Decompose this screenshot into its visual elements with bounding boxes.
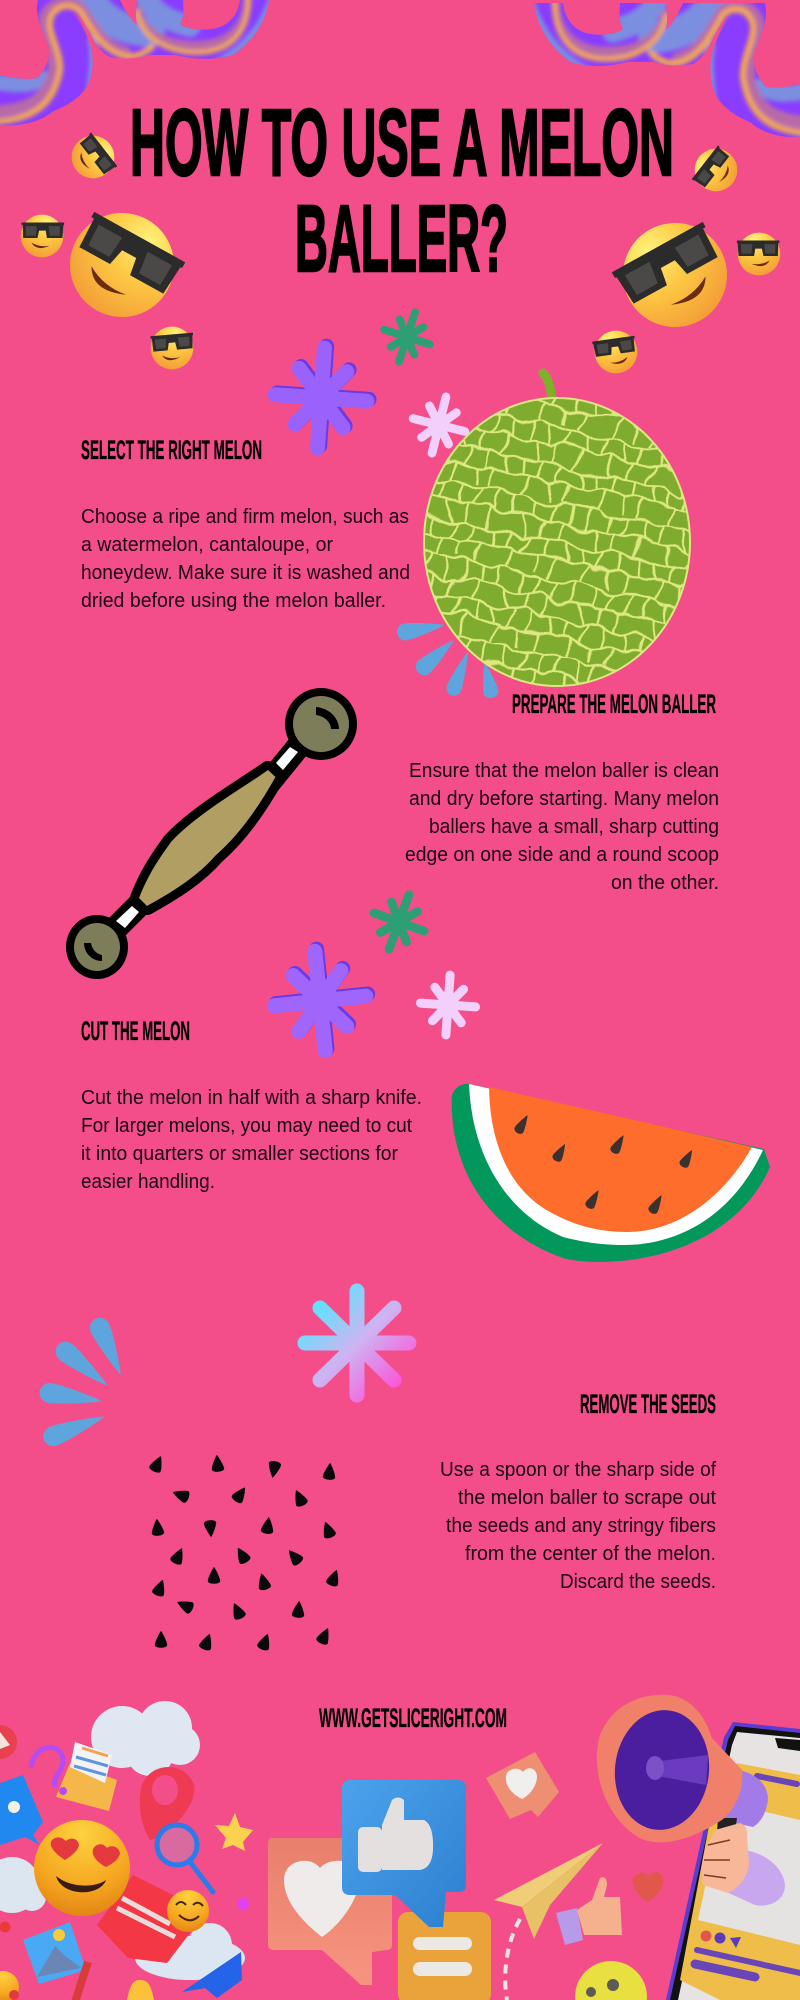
illustration: phone with megaphone	[597, 1695, 800, 2000]
icon: yellow paper plane	[494, 1843, 603, 1939]
text: select melon paragraph	[81, 506, 410, 612]
text: remove seeds paragraph: the seeds and any stringy fibers	[446, 1515, 716, 1537]
text: select melon paragraph: dried before using the melon baller.	[81, 590, 386, 612]
icon: lower cloud	[135, 1923, 245, 1980]
illustration: scattered seeds	[148, 1454, 343, 1652]
icon: green asterisk middle	[364, 886, 434, 958]
illustration: social media cluster left	[0, 1701, 253, 2000]
text: select melon paragraph: Choose a ripe and firm melon, such as	[81, 506, 409, 528]
icon: gradient asterisk	[305, 1291, 409, 1395]
icon: large sunglasses emoji right	[603, 204, 746, 347]
text: cut paragraph	[81, 1087, 422, 1193]
dot: red	[0, 1922, 10, 1932]
icon: red play button	[0, 1725, 17, 1759]
icon: yellow star	[215, 1813, 253, 1851]
text: CUT THE MELON	[81, 1016, 190, 1046]
text: cut paragraph: For larger melons, you may need to cut	[81, 1115, 412, 1137]
icon: megaphone	[597, 1695, 768, 1842]
arrow: dashed flight path	[505, 1919, 520, 2000]
text: prepare paragraph: edge on one side and a round scoop	[405, 844, 719, 866]
icon: small emoji bottom right	[591, 328, 640, 376]
icon: picture tile	[23, 1922, 86, 1984]
illustration: cantaloupe melon	[423, 368, 691, 687]
icon: purple asterisk middle	[269, 944, 373, 1056]
text: remove seeds paragraph	[440, 1459, 716, 1593]
icon: orange comment bubble	[398, 1912, 491, 2000]
title	[130, 90, 674, 292]
text: prepare paragraph	[405, 760, 719, 894]
text: remove seeds paragraph: from the center of the melon.	[465, 1543, 716, 1565]
icon: question mark	[31, 1747, 67, 1795]
swirl: top right	[528, 0, 800, 142]
text: prepare paragraph: ballers have a small, sharp cutting	[429, 816, 719, 838]
icon: purple asterisk top	[272, 343, 373, 451]
text: prepare paragraph: Ensure that the melon baller is clean	[409, 760, 719, 782]
icon: small emoji top left	[63, 127, 123, 188]
icon: left cloud	[0, 1857, 46, 1913]
text: cut paragraph: it into quarters or smaller sections for	[81, 1143, 398, 1165]
text: cut paragraph: easier handling.	[81, 1171, 215, 1193]
icon: blue speech bubble	[0, 1775, 43, 1845]
icon: pale pink asterisk middle	[418, 973, 478, 1037]
icon: small emoji bottom left	[149, 325, 196, 371]
icon: blue like bubble	[342, 1780, 466, 1927]
icon: small smile emoji	[167, 1890, 209, 1932]
icon: thumbs-up hand	[556, 1877, 622, 1945]
icon: small emoji far left	[21, 215, 64, 257]
panel: phone post card	[680, 1763, 800, 2000]
icon: envelope with letter	[56, 1742, 117, 1811]
text: select melon paragraph: honeydew. Make sure it is washed and	[81, 562, 410, 584]
icon: green asterisk top	[376, 305, 438, 369]
icon: blue drops by melon	[396, 617, 500, 699]
icon: small heart bubble	[486, 1752, 559, 1819]
title: BALLER?	[295, 186, 508, 292]
text: select melon paragraph: a watermelon, cantaloupe, or	[81, 534, 333, 556]
footer url: WWW.GETSLICERIGHT.COM	[319, 1703, 507, 1733]
icon: heart bubble	[268, 1838, 392, 1985]
icon: location pin	[140, 1767, 194, 1840]
icon: corner emoji	[0, 1971, 19, 2000]
text: remove seeds paragraph: Discard the seeds.	[560, 1571, 716, 1593]
text: prepare paragraph: and dry before starting. Many melon	[409, 788, 719, 810]
text: prepare paragraph: on the other.	[611, 872, 719, 894]
icon: red stick	[75, 1962, 88, 2000]
text: cut paragraph: Cut the melon in half with a sharp knife.	[81, 1087, 422, 1109]
icon: red card	[97, 1875, 190, 1963]
icon: small emoji far right	[737, 233, 780, 275]
text: remove seeds paragraph: Use a spoon or the sharp side of	[440, 1459, 716, 1481]
text: SELECT THE RIGHT MELON	[81, 435, 262, 465]
icon: small red heart	[633, 1872, 663, 1902]
icon: magnifier	[157, 1825, 213, 1892]
illustration: watermelon slice	[452, 1084, 770, 1262]
illustration: social media cluster centre	[268, 1752, 663, 2000]
icon: small emoji top right	[686, 140, 746, 201]
swirl: top left	[0, 0, 275, 130]
icon: blue drops left	[38, 1315, 130, 1449]
icon: yellow bell	[127, 1980, 154, 2000]
icon: pale pink asterisk top	[406, 390, 472, 460]
icon: top cloud	[91, 1701, 200, 1776]
icon: large sunglasses emoji left	[51, 194, 194, 337]
dot: magenta	[237, 1898, 249, 1910]
text: remove seeds paragraph: the melon baller to scrape out	[458, 1487, 716, 1509]
icon: hand holding megaphone	[702, 1823, 785, 1906]
illustration: melon baller tool	[66, 688, 357, 979]
icon: heart-eyes emoji	[34, 1820, 130, 1916]
icon: blue paper plane	[182, 1952, 242, 1998]
icon: phone body	[666, 1722, 800, 2000]
icon: curious emoji	[575, 1961, 647, 2000]
